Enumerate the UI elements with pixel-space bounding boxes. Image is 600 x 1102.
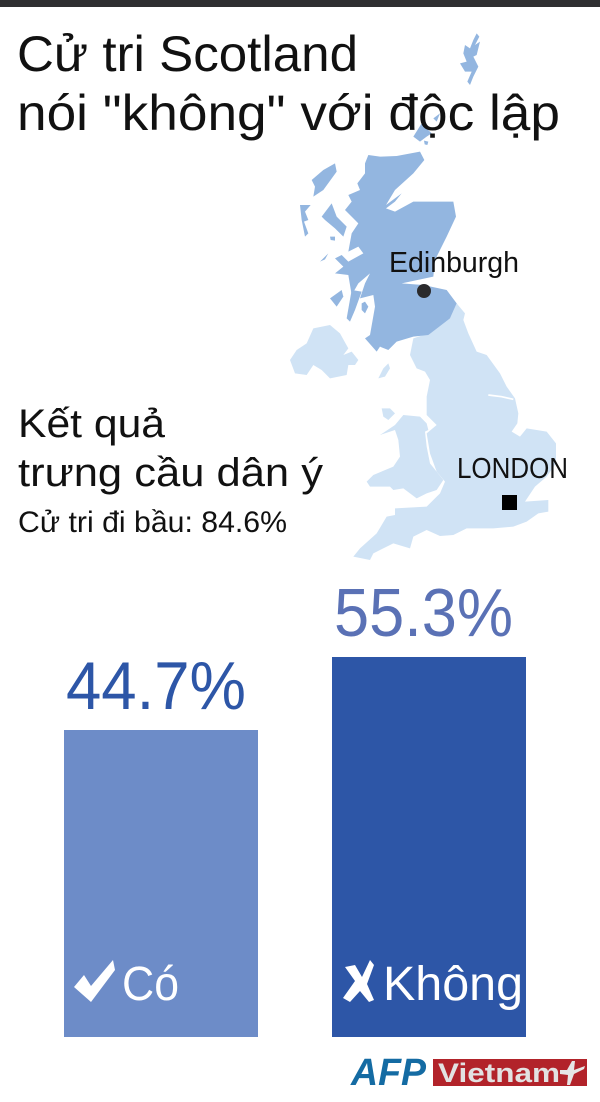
subtitle: referendum results (18, 402, 323, 539)
turnout: Cử tri đi bầu: 84.6% (18, 506, 287, 539)
Small Isles (320, 237, 335, 262)
bar: no 55.3%: Không (383, 958, 523, 1011)
logo: AFP: AFP (350, 1052, 427, 1094)
Arran (362, 302, 368, 313)
title (17, 26, 560, 141)
marker: London (457, 453, 568, 510)
title: nói "không" với độc lập (17, 85, 560, 141)
title: Cử tri Scotland (17, 26, 358, 82)
Hebrides: Uists (300, 205, 311, 237)
map detail: Humber estuary (488, 395, 513, 399)
icon: cross mark (343, 960, 374, 1002)
Orkney (413, 113, 440, 145)
Skye (322, 203, 347, 237)
map region: Northern Ireland (290, 325, 358, 378)
subtitle: referendum results: trưng cầu dân ý (18, 451, 323, 495)
map: United Kingdom (290, 33, 556, 560)
map region: Scotland (300, 33, 480, 352)
bar: yes 44.7% (64, 648, 258, 1037)
Hebrides: Lewis and Harris (312, 163, 337, 197)
bar: no 55.3%: 55.3% (334, 575, 513, 651)
map region: Wales (367, 415, 443, 498)
map region: England (353, 303, 556, 560)
marker: London: LONDON (457, 453, 568, 485)
bar: yes 44.7%: 44.7% (66, 648, 246, 724)
map region: Anglesey (382, 408, 395, 420)
marker: Edinburgh: Edinburgh (389, 247, 519, 279)
bar: no 55.3% (332, 575, 526, 1037)
bar: yes 44.7%: Có (122, 958, 179, 1011)
subtitle: referendum results: Kết quả (18, 402, 166, 446)
Shetland (460, 33, 480, 85)
Kintyre (347, 290, 362, 322)
Jura (330, 290, 343, 307)
map region: Isle of Man (378, 363, 390, 378)
marker: Edinburgh (389, 247, 519, 298)
logo: Vietnam+ (433, 1058, 587, 1088)
icon: check mark (74, 960, 115, 1002)
logo: Vietnam+: Vietnam (438, 1058, 560, 1088)
